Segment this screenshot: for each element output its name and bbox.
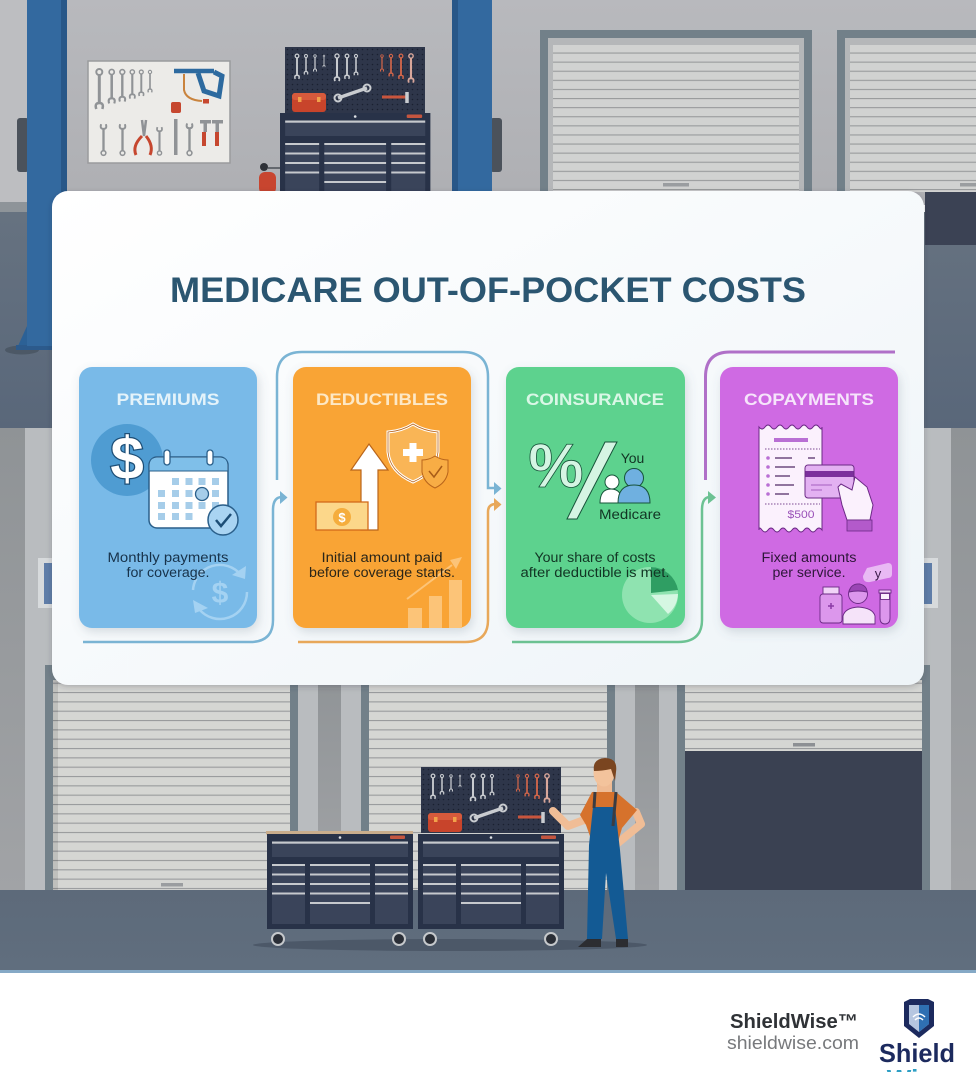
text: copayments description bbox=[762, 550, 857, 580]
lower door 2 bbox=[361, 665, 615, 890]
garage background, upper wall bbox=[0, 0, 976, 212]
icon: pie chart watermark bbox=[622, 567, 678, 623]
blue tool gun bbox=[171, 71, 222, 113]
title: MEDICARE OUT-OF-POCKET COSTS bbox=[170, 270, 806, 310]
card: copayments bbox=[720, 367, 898, 628]
heading: premiums: PREMIUMS bbox=[116, 390, 220, 409]
text: premiums description: for coverage. bbox=[126, 565, 210, 580]
main white panel bbox=[52, 191, 924, 685]
lower pegboard bbox=[421, 767, 561, 833]
icon: growth bars watermark bbox=[407, 557, 462, 628]
card: coinsurance bbox=[506, 367, 685, 628]
icon: test tube bbox=[879, 590, 891, 624]
upper pegboard bbox=[285, 47, 425, 113]
connector: over deductibles bbox=[277, 352, 502, 495]
icon: receipt bbox=[759, 425, 822, 532]
lower door 1 bbox=[45, 665, 298, 890]
icon: dollar coin: $ bbox=[110, 425, 144, 492]
workbench left bbox=[266, 831, 413, 929]
icon: percent and slash: % bbox=[528, 432, 584, 501]
icon: dollar bill bbox=[316, 502, 368, 530]
footer brand text: shieldwise.com bbox=[727, 1033, 859, 1053]
text: coinsurance description bbox=[520, 550, 670, 580]
heading: copayments: COPAYMENTS bbox=[744, 390, 874, 409]
icon: recurring dollar watermark bbox=[193, 565, 247, 619]
label: you: You bbox=[621, 450, 644, 466]
dark slate band bbox=[0, 190, 976, 428]
text: copayments description: Fixed amounts bbox=[762, 550, 857, 565]
floor bbox=[0, 890, 976, 1088]
text: copayments description: per service. bbox=[772, 565, 846, 580]
pliers bbox=[135, 120, 151, 155]
connector: premiums to deductibles bbox=[83, 491, 288, 642]
icon: calendar bbox=[149, 450, 238, 535]
text: premiums description bbox=[108, 550, 229, 580]
icon: up arrow bbox=[351, 444, 388, 530]
card: deductibles bbox=[293, 367, 471, 628]
icon: doctor bbox=[843, 584, 875, 624]
roll-up door: top centre bbox=[540, 30, 812, 192]
white tool board bbox=[88, 61, 230, 163]
icon: people bbox=[600, 468, 650, 503]
upper tool chest bbox=[280, 113, 430, 208]
lift post: left bbox=[5, 0, 67, 354]
label: medicare: Medicare bbox=[599, 506, 661, 522]
connector: coinsurance to copayments bbox=[512, 491, 716, 642]
text: premiums description: Monthly payments bbox=[108, 550, 229, 565]
casters bbox=[272, 933, 557, 945]
connector: over copayments bbox=[706, 352, 895, 480]
mechanic bbox=[553, 758, 641, 947]
lower wall bbox=[0, 428, 976, 890]
text: coinsurance description: after deductible is met. bbox=[520, 565, 670, 580]
text: deductibles description: Initial amount paid bbox=[322, 550, 442, 565]
icon: receipt: $500 bbox=[788, 509, 814, 521]
icon: medicine bottle bbox=[820, 587, 842, 623]
lower door 3, half open bbox=[677, 665, 930, 890]
card: premiums bbox=[79, 367, 257, 628]
icon: percent and slash bbox=[528, 432, 617, 519]
icon: hand holding card bbox=[805, 465, 873, 531]
extinguisher bbox=[259, 163, 280, 194]
hammers handles bbox=[202, 132, 219, 146]
lift post: right bbox=[452, 0, 502, 195]
roll-up door: top right bbox=[837, 30, 976, 192]
icon: recurring dollar watermark: $ bbox=[212, 577, 229, 610]
text: deductibles description: before coverage starts. bbox=[309, 565, 455, 580]
footer brand text: ShieldWise™ bbox=[730, 1011, 858, 1033]
footer logo: Shield bbox=[879, 1038, 955, 1068]
icon: shield with plus bbox=[388, 424, 448, 488]
icon: dollar bill: $ bbox=[338, 510, 346, 525]
floor shadow bbox=[253, 939, 647, 951]
text: coinsurance description: Your share of costs bbox=[534, 550, 656, 565]
workbench right bbox=[418, 834, 564, 929]
icon: dollar coin bbox=[91, 424, 163, 496]
text: deductibles description bbox=[309, 550, 455, 580]
footer logo bbox=[880, 999, 954, 1072]
heading: deductibles: DEDUCTIBLES bbox=[316, 390, 448, 409]
connector: deductibles to coinsurance bbox=[298, 498, 502, 642]
icon: speech bubble: y bbox=[875, 566, 882, 581]
icon: speech bubble bbox=[863, 563, 892, 582]
wrenches bbox=[96, 69, 223, 155]
footer brand text bbox=[727, 1011, 859, 1053]
heading: coinsurance: COINSURANCE bbox=[526, 390, 664, 409]
